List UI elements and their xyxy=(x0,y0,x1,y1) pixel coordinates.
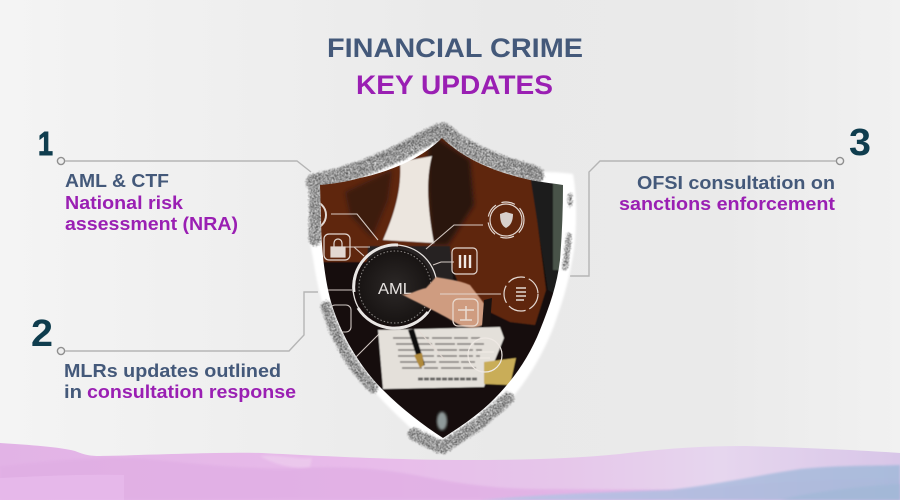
number 3: 3 xyxy=(849,122,871,164)
shield xyxy=(308,124,576,455)
icon: lower circle xyxy=(468,338,502,372)
gold gavel xyxy=(484,358,516,385)
tablet xyxy=(366,245,454,281)
icon: shield circle xyxy=(488,202,524,238)
text block 1: assessment (NRA) xyxy=(65,213,238,234)
icon: document circle xyxy=(504,277,538,311)
white shirt xyxy=(383,156,434,243)
dark right background xyxy=(530,180,558,293)
watercolor wave band xyxy=(0,443,900,500)
document xyxy=(378,327,504,389)
text block 1 xyxy=(65,170,238,234)
icon: partial left box xyxy=(330,305,351,332)
text block 1: AML & CTF xyxy=(65,170,169,191)
icon: people xyxy=(452,248,477,274)
dark hair xyxy=(345,132,474,245)
icon: partial left circle xyxy=(320,202,327,227)
text block 3: sanctions enforcement xyxy=(619,193,835,214)
hand xyxy=(401,277,488,327)
jacket xyxy=(315,130,546,325)
desk reflection xyxy=(437,412,447,430)
title xyxy=(327,33,583,100)
shield grunge edge xyxy=(314,131,570,448)
title: FINANCIAL CRIME xyxy=(327,33,583,63)
watch strap xyxy=(482,298,492,327)
shield photo xyxy=(320,138,563,438)
shield white brush border xyxy=(308,124,576,455)
text block 3: OFSI consultation on xyxy=(637,172,835,193)
number 1: 1 xyxy=(38,125,53,162)
icon: lines overlay xyxy=(328,214,501,360)
text block 3 xyxy=(619,172,835,214)
text block 2: MLRs updates outlined xyxy=(64,360,281,381)
document text lines xyxy=(393,338,484,379)
icon: scales xyxy=(453,299,478,326)
title: KEY UPDATES xyxy=(356,70,553,100)
number 2: 2 xyxy=(31,313,53,355)
text block 1: National risk xyxy=(65,192,184,213)
text block 2 xyxy=(64,360,296,402)
icon: lock xyxy=(324,234,350,260)
text block 2: in xyxy=(64,381,82,402)
pen xyxy=(408,329,425,367)
connector 1 xyxy=(57,157,311,172)
text block 2: consultation response xyxy=(87,381,296,402)
connector 2 xyxy=(57,292,318,355)
AML dial xyxy=(353,245,437,329)
AML dial: AML xyxy=(378,281,412,298)
connector 3 xyxy=(570,157,844,276)
